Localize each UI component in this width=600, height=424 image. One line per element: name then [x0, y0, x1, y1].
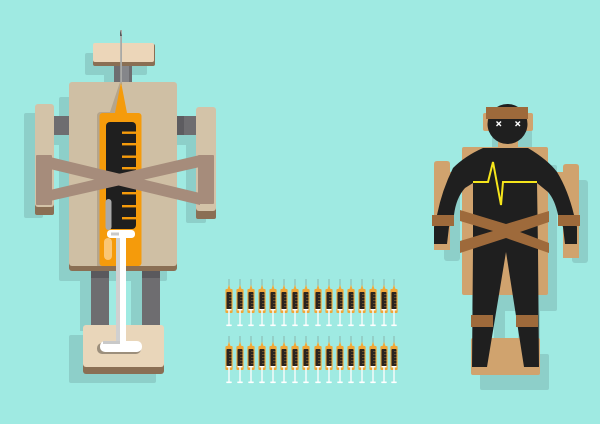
- heartbeat line: [473, 162, 537, 205]
- back board: [434, 141, 579, 375]
- headband: [486, 107, 528, 119]
- right connector: [177, 116, 196, 135]
- left arm: [35, 104, 54, 215]
- rows of small syringes: [225, 279, 398, 383]
- human figure strapped to board: [432, 104, 588, 390]
- body straps: [432, 210, 580, 327]
- black body: [434, 148, 577, 367]
- syringe body shadow: [97, 82, 120, 266]
- left connector: [54, 116, 69, 135]
- robot figure with giant syringe: [24, 30, 216, 383]
- dead eyes: [496, 122, 520, 126]
- foot block: [83, 325, 164, 374]
- torso: [69, 82, 177, 271]
- head board: [483, 113, 533, 131]
- plunger: [97, 230, 142, 354]
- robot shadows: [24, 53, 206, 383]
- top block: [93, 43, 155, 66]
- head: [488, 104, 528, 144]
- neck: [114, 66, 132, 82]
- straps: [36, 155, 214, 205]
- human shadows: [444, 130, 588, 390]
- syringe: [100, 30, 142, 266]
- legs: [91, 270, 160, 326]
- syringe row 2: [225, 336, 398, 383]
- right arm: [196, 107, 216, 219]
- syringe row 1: [225, 279, 398, 326]
